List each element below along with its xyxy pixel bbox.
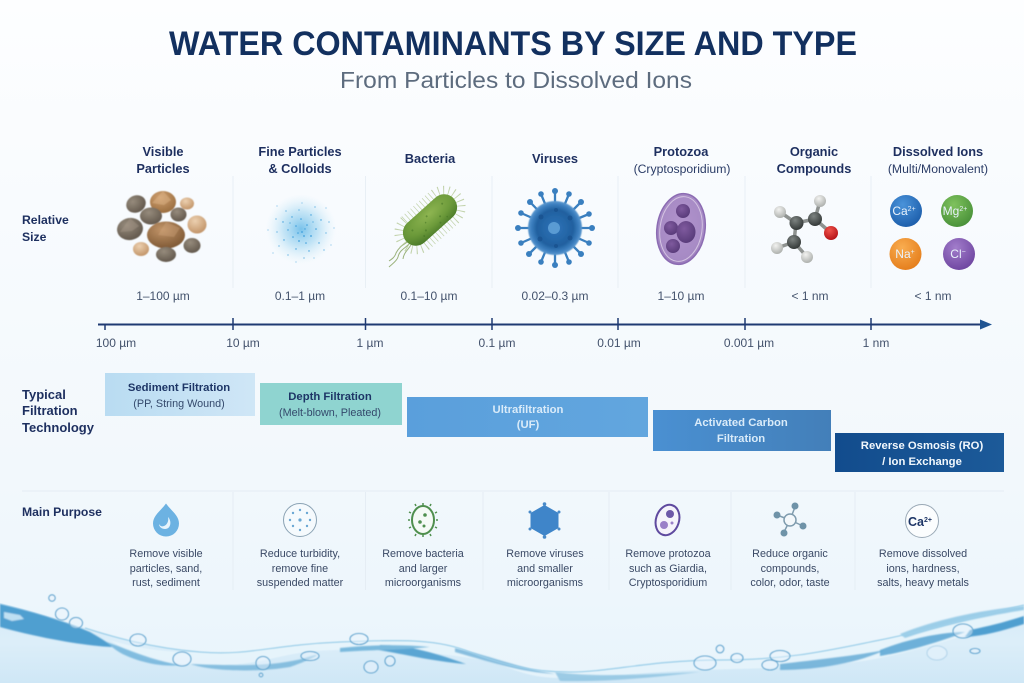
- axis labels: 100 µm: [96, 336, 136, 350]
- bar: reverse osmosis: [835, 433, 1004, 472]
- heading: Fine Particles: [258, 144, 342, 159]
- heading: Bacteria: [405, 151, 456, 166]
- column dividers: [233, 176, 871, 288]
- purpose: fine particles: [257, 504, 344, 589]
- row label: typical filtration technology: Filtration: [22, 403, 78, 418]
- icon: ions: 2+: [959, 206, 967, 213]
- darker water streaks: [0, 604, 1024, 681]
- subheading: (Cryptosporidium): [634, 162, 730, 176]
- axis labels: [96, 336, 889, 350]
- bar: reverse osmosis: Reverse Osmosis (RO): [861, 440, 983, 452]
- icon: bacterium: [389, 189, 462, 267]
- heading: Dissolved Ions: [893, 144, 983, 159]
- icon: green microbe: [408, 503, 438, 537]
- subtitle: From Particles to Dissolved Ions: [340, 67, 692, 93]
- text: color, odor, taste: [750, 577, 830, 589]
- icon: water drop: [153, 504, 179, 537]
- text: and larger: [399, 563, 448, 575]
- icon: ions: Mg: [943, 204, 959, 218]
- row label: relative size: Relative: [22, 213, 69, 227]
- size label: 0.1–10 µm: [401, 289, 457, 303]
- bar: ultrafiltration: Ultrafiltration: [493, 404, 564, 416]
- row label: typical filtration technology: Typical: [22, 387, 66, 402]
- text: suspended matter: [257, 577, 344, 589]
- size label: < 1 nm: [791, 289, 829, 303]
- heading: Viruses: [532, 151, 578, 166]
- column: viruses: [515, 151, 595, 303]
- icon: rocks: [115, 191, 206, 262]
- icon: calcium ion: Ca: [908, 515, 924, 529]
- text: microorganisms: [507, 577, 584, 589]
- size label: < 1 nm: [914, 289, 952, 303]
- column: protozoa: [634, 144, 730, 303]
- bar: sediment filtration: [105, 373, 255, 416]
- purpose: bacteria: [382, 503, 464, 589]
- icon: molecule network: [774, 502, 806, 536]
- row label: relative size: Size: [22, 230, 47, 244]
- water band: [110, 605, 1024, 678]
- icon: purple cyst: [652, 502, 683, 538]
- row label: typical filtration technology: Technology: [22, 420, 95, 435]
- bar: sediment filtration: Sediment Filtration: [128, 382, 230, 394]
- column: organic compounds: [771, 144, 851, 303]
- bar: ultrafiltration: (UF): [517, 419, 540, 431]
- crest line: [85, 605, 1024, 672]
- text: Reduce turbidity,: [260, 548, 340, 560]
- size scale axis: [96, 318, 992, 350]
- icon: ions: [890, 195, 975, 270]
- icon: particle cloud: [266, 194, 336, 264]
- heading: Particles: [136, 161, 190, 176]
- text: Remove bacteria: [382, 548, 464, 560]
- text: Remove dissolved: [879, 548, 967, 560]
- text: compounds,: [761, 563, 819, 575]
- water wave: [0, 595, 1024, 683]
- icon: virus: [515, 188, 595, 268]
- bar: depth filtration: [260, 383, 402, 425]
- heading: & Colloids: [268, 161, 332, 176]
- axis labels: 0.1 µm: [479, 336, 515, 350]
- icon: ions: Ca: [892, 204, 908, 218]
- bar: depth filtration: Depth Filtration: [288, 391, 372, 403]
- column: dissolved ions: [888, 144, 988, 303]
- axis labels: 1 nm: [863, 336, 889, 350]
- heading: Protozoa: [654, 144, 709, 159]
- size label: 0.02–0.3 µm: [522, 289, 588, 303]
- axis labels: 0.001 µm: [724, 336, 774, 350]
- icon: ions: Cl: [950, 247, 962, 261]
- icon: molecule: [771, 195, 838, 263]
- text: Remove protozoa: [625, 548, 711, 560]
- text: salts, heavy metals: [877, 577, 970, 589]
- text: Remove visible: [129, 548, 203, 560]
- title: WATER CONTAMINANTS BY SIZE AND TYPE: [169, 25, 857, 63]
- size label: 0.1–1 µm: [275, 289, 325, 303]
- icon: protozoan: [652, 191, 710, 267]
- column: fine particles and colloids: [258, 144, 342, 303]
- text: remove fine: [272, 563, 328, 575]
- icon: ions: −: [962, 249, 966, 256]
- heading: Visible: [142, 144, 184, 159]
- icon: ions: +: [911, 249, 915, 256]
- bubbles: [49, 595, 980, 677]
- size label: 1–10 µm: [658, 289, 704, 303]
- bar: activated carbon: Activated Carbon: [694, 417, 788, 429]
- text: particles, sand,: [130, 563, 202, 575]
- bar: activated carbon: Filtration: [717, 433, 765, 445]
- axis labels: 0.01 µm: [597, 336, 641, 350]
- icon: calcium ion: [906, 504, 938, 538]
- axis labels: 1 µm: [357, 336, 383, 350]
- icon: ions: Na: [895, 247, 911, 261]
- bar: reverse osmosis: / Ion Exchange: [882, 456, 962, 468]
- text: Reduce organic: [752, 548, 828, 560]
- text: ions, hardness,: [886, 563, 960, 575]
- column: visible particles: [115, 144, 206, 303]
- text: Remove viruses: [506, 548, 584, 560]
- icon: hexagon virus: [528, 502, 560, 539]
- icon: membrane dots: [284, 504, 316, 536]
- size label: 1–100 µm: [136, 289, 190, 303]
- heading: Compounds: [777, 161, 851, 176]
- bar: depth filtration: (Melt-blown, Pleated): [279, 407, 381, 419]
- text: microorganisms: [385, 577, 462, 589]
- water body: [0, 603, 1024, 683]
- bar: activated carbon: [653, 410, 831, 451]
- text: Cryptosporidium: [629, 577, 707, 589]
- purpose: protozoa: [625, 502, 711, 589]
- icon: calcium ion: 2+: [924, 517, 932, 524]
- column: bacteria: [389, 151, 462, 303]
- text: such as Giardia,: [629, 563, 707, 575]
- purpose: viruses: [506, 502, 584, 589]
- subheading: (Multi/Monovalent): [888, 162, 988, 176]
- purpose: dissolved ions: [877, 504, 970, 589]
- bar: ultrafiltration: [407, 397, 648, 437]
- purpose: visible particles: [129, 504, 203, 589]
- row label: main purpose: Main Purpose: [22, 505, 102, 519]
- text: and smaller: [517, 563, 573, 575]
- text: rust, sediment: [132, 577, 200, 589]
- icon: ions: 2+: [908, 206, 916, 213]
- heading: Organic: [790, 144, 838, 159]
- purpose: organic compounds: [750, 502, 830, 589]
- purpose dividers: [22, 491, 1004, 590]
- bar: sediment filtration: (PP, String Wound): [133, 398, 225, 410]
- axis labels: 10 µm: [226, 336, 260, 350]
